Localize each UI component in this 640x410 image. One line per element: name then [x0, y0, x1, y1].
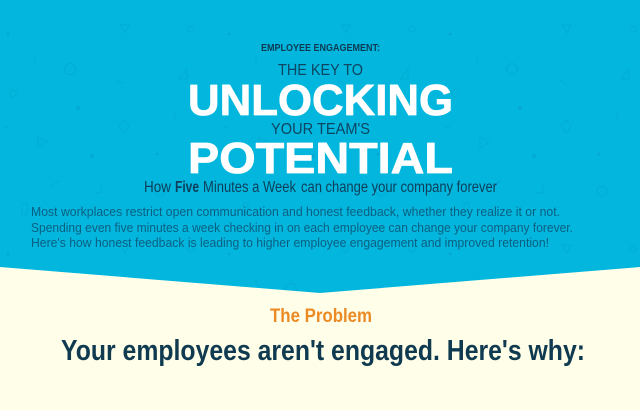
- decorative shape pattern: [0, 0, 640, 293]
- intro paragraph: [31, 204, 573, 250]
- intro paragraph: Here's how honest feedback is leading to higher employee engagement and improved retention!: [31, 235, 549, 250]
- panel: blue header with pointed bottom edge: [0, 0, 640, 293]
- section label: the problem: The Problem: [270, 306, 372, 327]
- subtitle: can change your company forever: [301, 179, 497, 196]
- intro paragraph: Most workplaces restrict open communication and honest feedback, whether they realize it or not.: [31, 204, 560, 219]
- title line: potential: POTENTIAL: [188, 134, 453, 183]
- title line: the key to: THE KEY TO: [278, 62, 363, 79]
- intro paragraph: Spending even five minutes a week checking in on each employee can change your company forever.: [31, 220, 573, 235]
- subtitle: Minutes a Week: [203, 179, 296, 196]
- subtitle: [144, 179, 497, 196]
- subtitle: Five: [175, 179, 199, 196]
- title line: unlocking: UNLOCKING: [188, 76, 453, 125]
- eyebrow heading: EMPLOYEE ENGAGEMENT:: [261, 43, 380, 54]
- title line: your team's: YOUR TEAM'S: [271, 121, 370, 138]
- subtitle: How: [144, 179, 172, 196]
